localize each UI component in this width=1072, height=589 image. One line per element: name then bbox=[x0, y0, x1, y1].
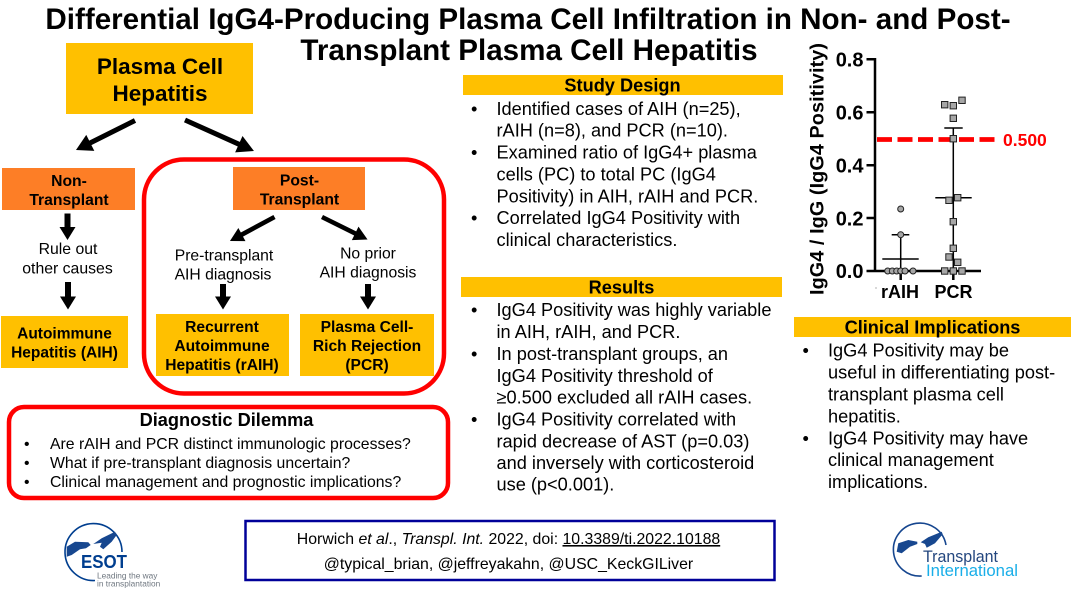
text: pre-transplant AIH diagnosis: AIH diagnosis bbox=[175, 266, 272, 284]
panel: clinical implications bbox=[794, 317, 1071, 492]
list: implications points: IgG4 Positivity may have bbox=[828, 428, 1028, 448]
list: results points: and inversely with corticosteroid bbox=[496, 453, 754, 473]
box: Plasma Cell Hepatitis: Plasma Cell bbox=[97, 54, 223, 79]
text: rule out other causes bbox=[22, 241, 113, 278]
panel: diagnostic dilemma bbox=[9, 407, 448, 498]
list: study design points: cells (PC) to total PC (IgG4 bbox=[496, 164, 716, 184]
box: Post-Transplant bbox=[233, 167, 365, 210]
list: results points: in AIH, rAIH, and PCR. bbox=[496, 322, 680, 342]
title bbox=[45, 3, 1011, 67]
y axis ticks and labels: 0.8 bbox=[836, 50, 864, 72]
y axis ticks and labels: 0.2 bbox=[836, 208, 864, 230]
arrow: to non-transplant bbox=[72, 112, 139, 158]
list: implications points: • bbox=[802, 341, 809, 361]
heading: clinical implications bbox=[794, 317, 1071, 338]
axis title: IgG4 / IgG (IgG4 Positivity) bbox=[806, 43, 828, 295]
list: results points: IgG4 Positivity correlated with bbox=[496, 410, 736, 430]
text: rule out other causes: Rule out bbox=[39, 241, 98, 258]
list: study design points: Positivity) in AIH, rAIH and PCR. bbox=[496, 186, 758, 206]
list: dilemma questions bbox=[24, 436, 411, 491]
list: implications points: useful in differentiating post- bbox=[828, 362, 1055, 382]
box: Non-Transplant: Transplant bbox=[29, 192, 109, 209]
heading: results: Results bbox=[589, 278, 654, 298]
arrow: down to rAIH bbox=[215, 284, 231, 310]
data points: rAIH bbox=[885, 206, 916, 274]
list: study design points: • bbox=[471, 208, 477, 228]
box: Autoimmune Hepatitis: Hepatitis (AIH) bbox=[11, 344, 118, 362]
logo: Transplant International: Transplant bbox=[923, 547, 998, 566]
citation box bbox=[246, 521, 774, 580]
data points: PCR bbox=[942, 97, 965, 274]
list: results points: ≥0.500 excluded all rAIH cases. bbox=[496, 388, 752, 408]
logo: ESOT: in transplantation bbox=[97, 578, 161, 588]
text: pre-transplant AIH diagnosis: Pre-transplant bbox=[175, 248, 274, 264]
list: dilemma questions: Clinical management and prognostic implications? bbox=[50, 474, 401, 491]
list: results points: IgG4 Positivity threshold of bbox=[496, 366, 714, 386]
list: dilemma questions: Are rAIH and PCR distinct immunologic processes? bbox=[50, 436, 411, 453]
error bars bbox=[882, 128, 972, 272]
box: Autoimmune Hepatitis bbox=[1, 316, 128, 368]
heading: study design: Study Design bbox=[564, 76, 681, 96]
chart: IgG4 positivity dot plot bbox=[806, 43, 1047, 302]
panel: classification flowchart bbox=[1, 43, 444, 394]
threshold line 0.500: 0.500 bbox=[1003, 130, 1047, 150]
list: study design points: • bbox=[471, 99, 477, 119]
list: results points: • bbox=[471, 410, 477, 430]
list: study design points: Examined ratio of IgG4+ plasma bbox=[496, 143, 758, 163]
text: rule out other causes: other causes bbox=[22, 260, 113, 278]
text: no prior AIH diagnosis: AIH diagnosis bbox=[320, 264, 417, 282]
list: study design points: Identified cases of AIH (n=25), bbox=[496, 99, 741, 119]
logo: Transplant International bbox=[893, 523, 1018, 580]
list: dilemma questions: What if pre-transplant diagnosis uncertain? bbox=[50, 455, 351, 472]
x axis and group labels: rAIH bbox=[881, 282, 919, 302]
heading: results bbox=[461, 277, 782, 298]
list: results points: rapid decrease of AST (p=0.03) bbox=[496, 431, 749, 451]
arrow: to post-transplant bbox=[181, 112, 258, 159]
y axis ticks and labels bbox=[836, 50, 875, 283]
list: implications points: clinical management bbox=[828, 450, 994, 470]
heading: clinical implications: Clinical Implications bbox=[845, 318, 1020, 338]
box: Plasma Cell-Rich Rejection bbox=[300, 314, 434, 376]
logo: ESOT bbox=[65, 524, 161, 588]
panel: results bbox=[461, 277, 782, 494]
y axis ticks and labels: 0.6 bbox=[836, 102, 864, 124]
text: no prior AIH diagnosis bbox=[320, 246, 417, 282]
list: study design points: Correlated IgG4 Positivity with bbox=[496, 208, 740, 228]
box: Non-Transplant bbox=[2, 168, 135, 210]
box: Plasma Cell Hepatitis: Hepatitis bbox=[112, 81, 208, 106]
list: results points: • bbox=[471, 344, 477, 364]
list: implications points: • bbox=[802, 428, 809, 448]
box: Plasma Cell Hepatitis bbox=[66, 43, 253, 114]
list: results points: use (p<0.001). bbox=[496, 474, 614, 494]
panel: study design bbox=[463, 75, 783, 250]
citation box: Horwich et al., Transpl. Int. 2022, doi: 10.3389/ti.2022.10188 bbox=[297, 531, 720, 548]
list: study design points: rAIH (n=8), and PCR (n=10). bbox=[496, 121, 728, 141]
list: implications points: transplant plasma cell bbox=[828, 385, 1004, 405]
list: results points: In post-transplant groups, an bbox=[496, 344, 728, 364]
box: Recurrent Autoimmune Hepatitis: Autoimmune bbox=[174, 338, 270, 355]
panel: post-transplant red outline bbox=[144, 160, 444, 394]
heading: study design bbox=[463, 75, 783, 96]
box: Post-Transplant: Transplant bbox=[260, 192, 340, 208]
logo: ESOT: Leading the way bbox=[97, 570, 158, 580]
list: implications points: hepatitis. bbox=[828, 407, 901, 427]
title: Differential IgG4-Producing Plasma Cell Infiltration in Non- and Post- bbox=[45, 3, 1011, 36]
box: Post-Transplant: Post- bbox=[280, 172, 319, 190]
arrow: to no prior diagnosis bbox=[319, 210, 371, 246]
list: dilemma questions: • bbox=[24, 474, 30, 491]
list: implications points: implications. bbox=[828, 472, 928, 492]
logo: ESOT: ESOT bbox=[81, 552, 127, 572]
list: results points: IgG4 Positivity was highly variable bbox=[496, 300, 771, 320]
box: Recurrent Autoimmune Hepatitis: Hepatitis (rAIH) bbox=[165, 357, 279, 374]
arrow: to pre-transplant diagnosis bbox=[226, 210, 278, 248]
list: study design points: clinical characteristics. bbox=[496, 230, 677, 250]
x axis and group labels bbox=[875, 271, 981, 302]
list: results points: • bbox=[471, 300, 477, 320]
y axis ticks and labels: 0.0 bbox=[836, 261, 864, 283]
list: dilemma questions: • bbox=[24, 436, 30, 453]
list: study design points: • bbox=[471, 143, 477, 163]
y axis ticks and labels: 0.4 bbox=[836, 156, 864, 178]
box: Recurrent Autoimmune Hepatitis bbox=[156, 314, 289, 376]
arrow: down to PCR bbox=[360, 284, 376, 310]
list: study design points bbox=[471, 99, 758, 250]
heading: diagnostic dilemma: Diagnostic Dilemma bbox=[140, 410, 314, 430]
box: Autoimmune Hepatitis: Autoimmune bbox=[17, 326, 112, 342]
citation box: @typical_brian, @jeffreyakahn, @USC_KeckGILiver bbox=[324, 556, 694, 573]
x axis and group labels: PCR bbox=[934, 282, 973, 302]
logo: Transplant International: International bbox=[926, 561, 1018, 580]
box: Recurrent Autoimmune Hepatitis: Recurrent bbox=[185, 319, 259, 336]
list: dilemma questions: • bbox=[24, 455, 30, 472]
title: Transplant Plasma Cell Hepatitis bbox=[300, 34, 758, 67]
box: Plasma Cell-Rich Rejection: Rich Rejection bbox=[313, 338, 421, 355]
arrow: down to AIH bbox=[60, 282, 76, 310]
box: Plasma Cell-Rich Rejection: (PCR) bbox=[345, 357, 389, 374]
text: no prior AIH diagnosis: No prior bbox=[340, 246, 396, 262]
text: pre-transplant AIH diagnosis bbox=[175, 248, 274, 284]
box: Non-Transplant: Non- bbox=[51, 173, 87, 190]
list: implications points bbox=[802, 341, 1055, 492]
arrow: down to rule out bbox=[60, 214, 76, 240]
box: Plasma Cell-Rich Rejection: Plasma Cell- bbox=[321, 319, 413, 336]
list: results points bbox=[471, 300, 771, 494]
list: implications points: IgG4 Positivity may be bbox=[828, 341, 1009, 361]
